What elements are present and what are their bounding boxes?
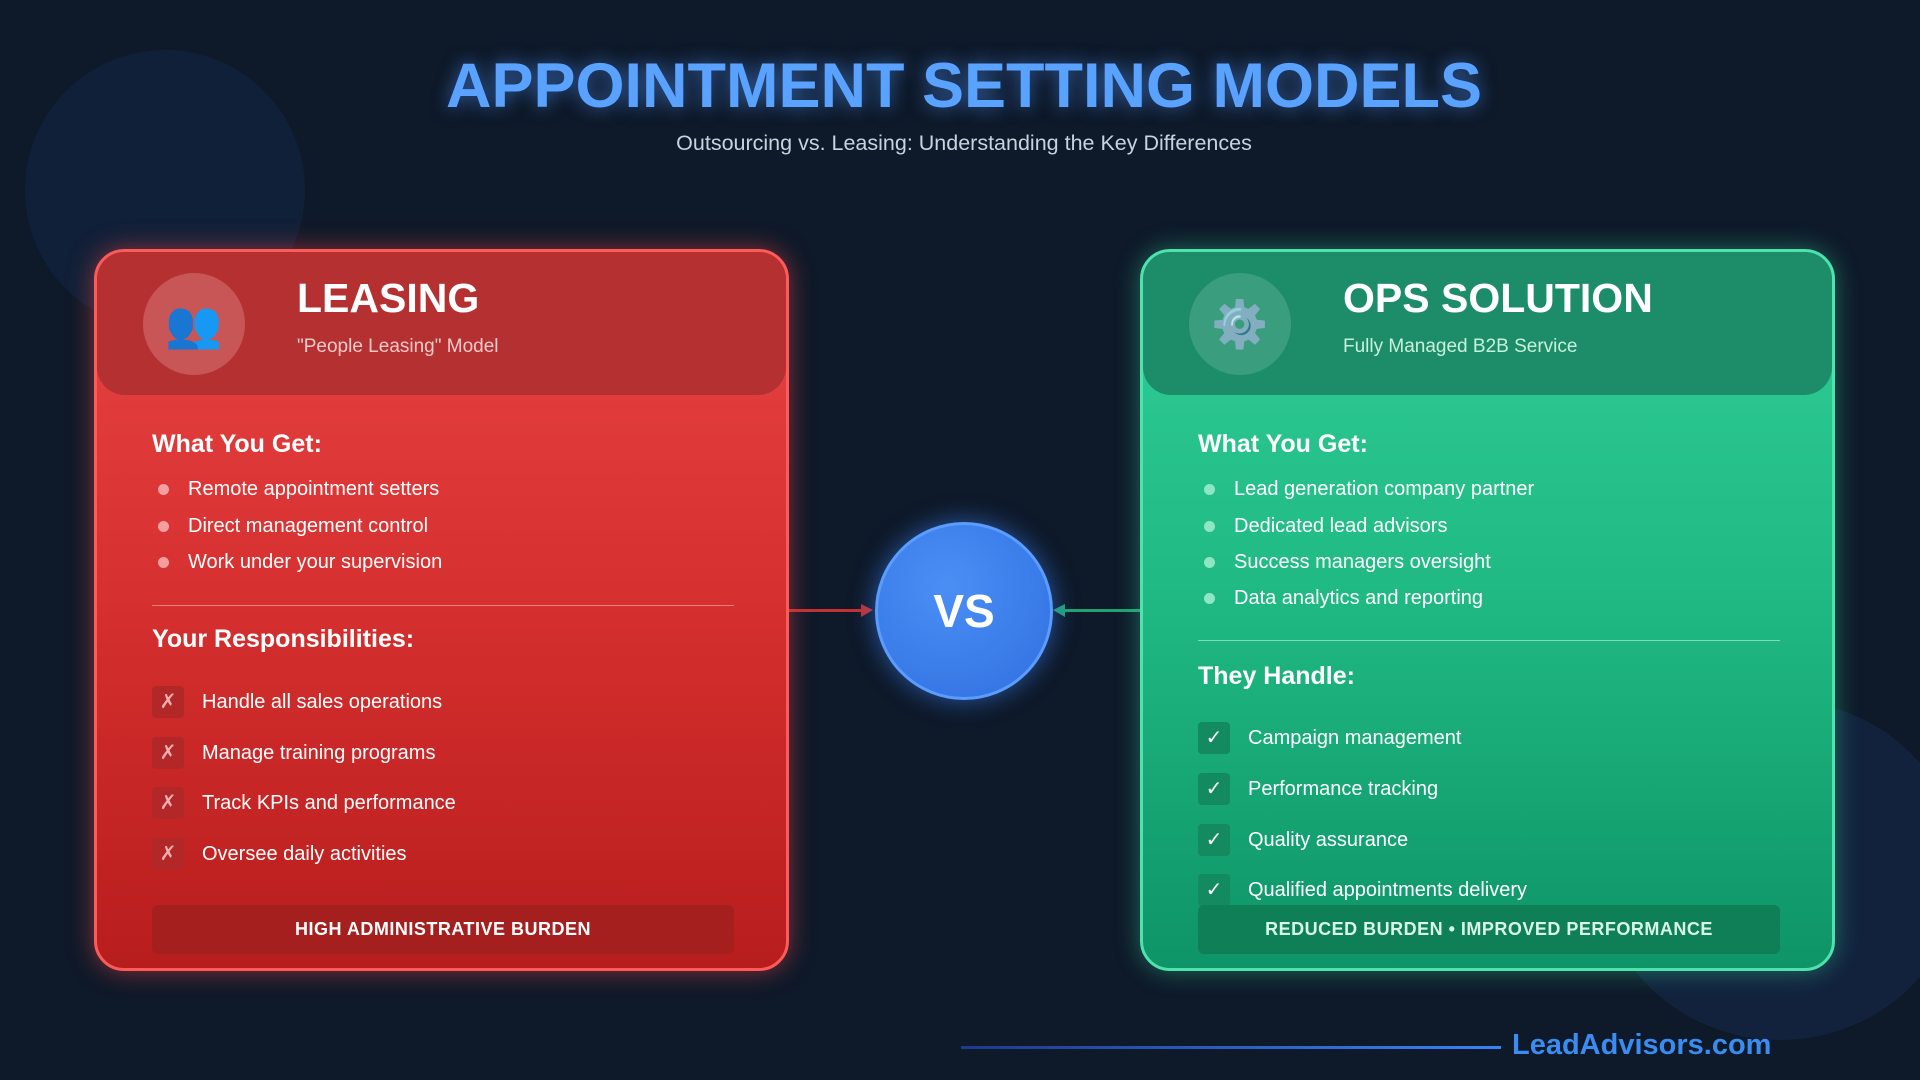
item [152, 737, 435, 769]
item [1198, 824, 1408, 856]
heading: responsibilities: Your Responsibilities: [152, 625, 414, 653]
item [152, 787, 456, 819]
item: Oversee daily activities [202, 843, 407, 865]
list item: Remote appointment setters [188, 478, 439, 500]
panel: leasing: ✗ [160, 691, 176, 713]
item: Track KPIs and performance [202, 792, 456, 814]
icon: gear [1189, 273, 1291, 375]
bottom bar [152, 905, 734, 954]
heading: they handle: They Handle: [1198, 662, 1355, 690]
item: Campaign management [1248, 727, 1461, 749]
footer line [961, 1046, 1501, 1049]
list item: Data analytics and reporting [1234, 587, 1483, 609]
subheading: "People Leasing" Model [297, 336, 499, 357]
icon: gear: ⚙️ [1211, 298, 1269, 350]
icon: people [143, 273, 245, 375]
panel: ops solution: ✓ [1206, 829, 1222, 851]
subheading: Fully Managed B2B Service [1343, 336, 1577, 357]
list item: Work under your supervision [188, 551, 442, 573]
item: Manage training programs [202, 742, 435, 764]
bottom bar: REDUCED BURDEN • IMPROVED PERFORMANCE [1265, 919, 1713, 939]
decorative circle [1600, 700, 1920, 1040]
title: APPOINTMENT SETTING MODELS [446, 51, 1482, 121]
panel: leasing: ✗ [160, 792, 176, 814]
subtitle: Outsourcing vs. Leasing: Understanding the Key Differences [676, 131, 1252, 155]
heading: OPS SOLUTION: OPS SOLUTION [1343, 275, 1653, 321]
heading: what you get: What You Get: [152, 430, 322, 458]
item [1198, 722, 1462, 754]
connector arrow: green [1053, 604, 1140, 617]
connector arrow: red [789, 604, 873, 617]
heading: what you get: What You Get: [1198, 430, 1368, 458]
list item: Direct management control [188, 515, 428, 537]
item: Performance tracking [1248, 778, 1438, 800]
heading: LEASING: LEASING [297, 275, 479, 321]
item [152, 686, 442, 718]
panel: leasing: ✗ [160, 742, 176, 764]
header: ops [1143, 252, 1832, 395]
header: leasing [97, 252, 786, 395]
VS circle: VS [933, 585, 995, 637]
VS circle [875, 522, 1053, 700]
brand: LeadAdvisors.com [1512, 1029, 1771, 1061]
panel: ops solution: ✓ [1206, 778, 1222, 800]
item [1198, 773, 1438, 805]
list item: Dedicated lead advisors [1234, 515, 1447, 537]
panel: ops solution: ✓ [1206, 727, 1222, 749]
item: Quality assurance [1248, 829, 1408, 851]
list item: Success managers oversight [1234, 551, 1491, 573]
item: Qualified appointments delivery [1248, 879, 1527, 901]
bottom bar: HIGH ADMINISTRATIVE BURDEN [295, 919, 591, 939]
panel: ops solution: ✓ [1206, 879, 1222, 901]
bottom bar [1198, 905, 1780, 954]
decorative circle [25, 50, 305, 330]
list item: Lead generation company partner [1234, 478, 1534, 500]
icon: people: 👥 [165, 298, 223, 350]
item [1198, 874, 1527, 906]
panel: leasing: ✗ [160, 843, 176, 865]
item [152, 838, 407, 870]
panel: ops solution [1140, 249, 1835, 971]
panel: leasing [94, 249, 789, 971]
item: Handle all sales operations [202, 691, 442, 713]
